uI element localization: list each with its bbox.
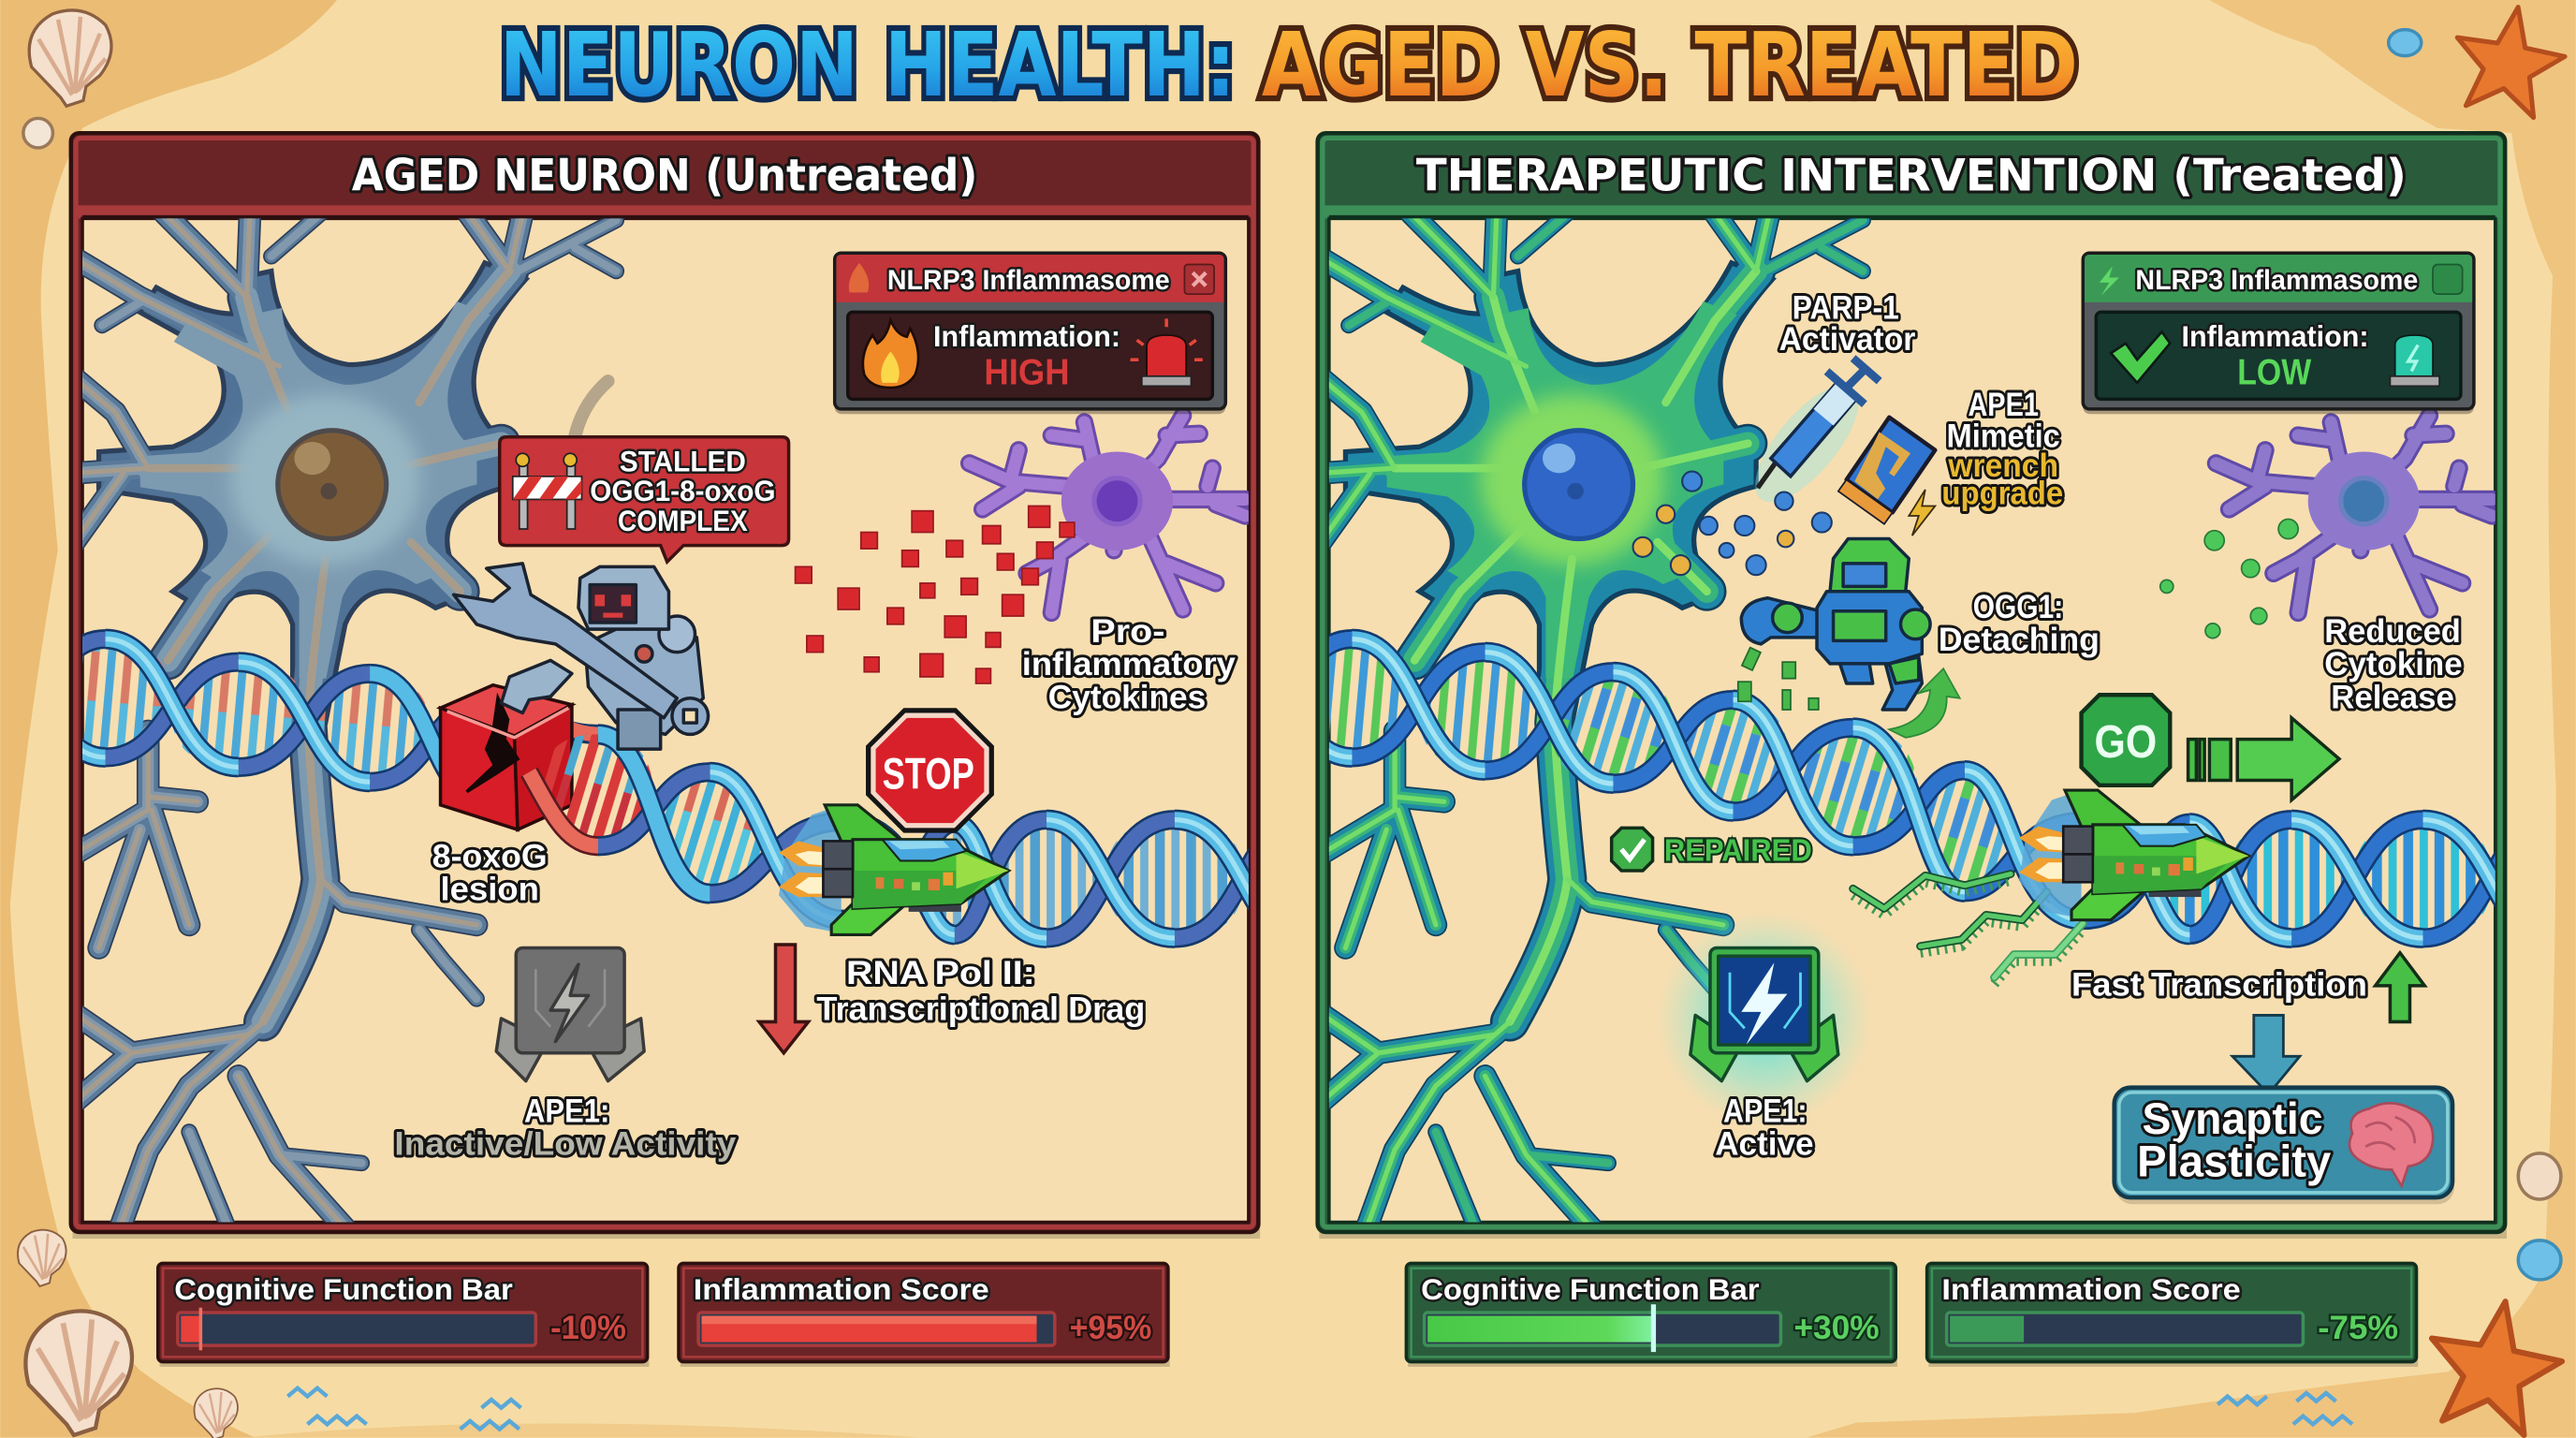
- title: blue part: NEURON HEALTH:: [500, 14, 1236, 117]
- label: PARP-1 activator: PARP-1: [1793, 289, 1899, 326]
- icon: stalled RNA polymerase rocket: [779, 805, 1009, 934]
- decoration: bottom-right starfish: [2418, 1290, 2570, 1438]
- icon: small flame: [849, 263, 869, 292]
- particles: blue and gold: [1632, 472, 1832, 575]
- particles: green cytokines: [2160, 519, 2298, 638]
- decoration: left small shell: [18, 1230, 66, 1286]
- icon: APE1 mimetic vial: [1838, 418, 1935, 536]
- stat card: aged cognitive function: Cognitive Function Bar: [174, 1272, 513, 1306]
- particles: green fragments: [1738, 648, 1819, 710]
- label: pro-inflammatory cytokines: inflammatory: [1022, 646, 1236, 682]
- panel frame: [71, 133, 1260, 1239]
- stat card: aged inflammation score: [679, 1263, 1170, 1367]
- stat card: treated cognitive function: Cognitive Function Bar: [1421, 1272, 1760, 1306]
- icon: brain: [2349, 1103, 2433, 1186]
- label: reduced cytokine release: Release: [2331, 679, 2454, 715]
- label: APE1 active: Active: [1715, 1126, 1814, 1163]
- icon: APE1 inactive chip: [496, 947, 644, 1081]
- close button: [1184, 265, 1214, 294]
- widget: NLRP3 high: [835, 253, 1225, 414]
- progress bar: [698, 1313, 1055, 1345]
- label: APE1 inactive: Inactive/Low Activity: [394, 1126, 737, 1163]
- DNA: red damaged lobe over lesion: [529, 734, 710, 894]
- status button: [2433, 265, 2463, 294]
- widget: NLRP3 high: HIGH: [984, 353, 1070, 393]
- decoration: right shell: [2518, 1153, 2561, 1199]
- arrow: up transcription: [2376, 953, 2424, 1021]
- progress bar: [178, 1308, 535, 1350]
- stat card: treated inflammation score: Inflammation Score: [1941, 1272, 2241, 1306]
- label: PARP-1 activator: Activator: [1779, 321, 1916, 358]
- panel: therapeutic intervention (treated): [158, 133, 2551, 1367]
- badge: repaired: [1612, 828, 1812, 871]
- decoration: top-left shell: [29, 10, 111, 106]
- aged neuron: [74, 213, 616, 1232]
- widget: NLRP3 high: NLRP3 Inflammasome: [887, 265, 1170, 296]
- microglia: pro-inflammatory: [970, 416, 1245, 613]
- label: APE1 mimetic wrench upgrade: wrench: [1947, 448, 2058, 484]
- decoration: top-right blue pebble: [2389, 30, 2422, 56]
- decoration: small pink shell: [195, 1388, 238, 1438]
- label: OGG1 detaching: [1939, 589, 2100, 658]
- arrow: transcription drag down: [759, 945, 809, 1053]
- decoration: right blue pebble: [2518, 1240, 2561, 1280]
- DNA helix repaired: [1221, 633, 2551, 938]
- callout: stalled complex: [500, 437, 789, 562]
- DNA helix with lesion: [0, 624, 1303, 938]
- cytokines: red particles: [796, 506, 1075, 683]
- stat card: aged cognitive function: -10%: [550, 1310, 626, 1346]
- neuron nucleus: [278, 431, 387, 539]
- widget: NLRP3 low: LOW: [2237, 353, 2312, 393]
- stat card: treated cognitive function: [1406, 1263, 1897, 1367]
- label: 8-oxoG lesion: [432, 838, 548, 908]
- stat card: aged cognitive function: [158, 1263, 649, 1367]
- callout: stalled complex: COMPLEX: [618, 504, 748, 537]
- stat card: treated inflammation score: [1927, 1263, 2418, 1367]
- mRNA strands: [1853, 874, 2083, 984]
- label: APE1 inactive: APE1:: [524, 1093, 609, 1129]
- label: fast transcription: Fast Transcription: [2071, 966, 2367, 1003]
- icon: check mark: [2111, 331, 2170, 383]
- label: APE1 mimetic wrench upgrade: [1941, 387, 2063, 512]
- label: reduced cytokine release: [2324, 613, 2463, 715]
- progress bar: [1947, 1313, 2303, 1345]
- panel scene: [82, 218, 1249, 1223]
- icon: flame: [863, 320, 918, 388]
- callout: stalled complex: OGG1-8-oxoG: [590, 474, 776, 507]
- panel frame: [1318, 133, 2507, 1239]
- treated neuron: [1321, 213, 1863, 1232]
- neuron nucleus: [1525, 431, 1632, 539]
- badge: GO sign: [2082, 695, 2170, 785]
- icon: PARP-1 syringe: [1738, 359, 1880, 518]
- stat card: treated inflammation score: -75%: [2318, 1310, 2398, 1346]
- label: reduced cytokine release: Reduced: [2324, 613, 2461, 650]
- decoration: top-right starfish: [2446, 0, 2572, 121]
- badge: GO sign: GO: [2095, 717, 2157, 768]
- panel: aged neuron (untreated): [0, 133, 1303, 1239]
- icon: 8-oxoG lesion cube: [441, 685, 572, 829]
- label: pro-inflammatory cytokines: [1022, 613, 1236, 715]
- label: APE1 mimetic wrench upgrade: Mimetic: [1947, 418, 2060, 454]
- icon: fast RNA polymerase rocket: [2019, 790, 2249, 920]
- label: APE1 mimetic wrench upgrade: upgrade: [1941, 476, 2063, 512]
- callout: synaptic plasticity: [2115, 1088, 2454, 1204]
- progress bar: [1425, 1304, 1780, 1352]
- panel heading: AGED NEURON (Untreated): [352, 151, 977, 202]
- decoration: water ripples left: [287, 1388, 521, 1430]
- arrow: forward green: [2188, 718, 2339, 800]
- wrench: [454, 564, 709, 734]
- icon: teal siren: [2390, 335, 2439, 386]
- robot: detaching OGG1: [1741, 539, 1930, 710]
- callout: synaptic plasticity: Plasticity: [2137, 1137, 2332, 1186]
- panel scene: [1221, 213, 2551, 1232]
- label: APE1 inactive: [394, 1093, 737, 1163]
- decoration: bottom-left shell: [25, 1311, 132, 1435]
- badge: repaired: REPAIRED: [1664, 833, 1812, 868]
- icon: stop sign: STOP: [883, 749, 974, 799]
- label: PARP-1 activator: [1779, 289, 1916, 358]
- label: APE1 active: APE1:: [1723, 1093, 1807, 1129]
- icon: red siren: [1131, 318, 1203, 386]
- robot: stalled OGG1 with wrench: [454, 564, 709, 749]
- arrow: curved detaching: [1889, 668, 1960, 738]
- icon: small bolt: [2100, 266, 2119, 296]
- decoration: water ripples right: [2217, 1393, 2352, 1424]
- stat card: aged inflammation score: Inflammation Score: [694, 1272, 989, 1306]
- decoration: small pebble: [23, 118, 52, 148]
- title: orange part: AGED VS. TREATED: [1262, 14, 2078, 117]
- label: RNA Pol II transcriptional drag: Transcriptional Drag: [816, 991, 1145, 1028]
- label: OGG1 detaching: Detaching: [1939, 622, 2100, 658]
- icon: check badge: [1612, 828, 1653, 871]
- label: pro-inflammatory cytokines: Pro-: [1090, 613, 1164, 650]
- label: APE1 active: [1715, 1093, 1814, 1163]
- microglia: reduced activation: [2216, 416, 2492, 613]
- callout: stalled complex: STALLED: [620, 445, 746, 478]
- label: reduced cytokine release: Cytokine: [2324, 646, 2463, 682]
- widget: NLRP3 low: Inflammation:: [2182, 319, 2369, 353]
- arrow: down to synaptic plasticity: [2232, 1015, 2300, 1094]
- title: [500, 14, 2078, 117]
- label: OGG1 detaching: OGG1:: [1973, 589, 2063, 625]
- label: APE1 mimetic wrench upgrade: APE1: [1968, 387, 2039, 423]
- label: RNA Pol II transcriptional drag: RNA Pol II:: [846, 955, 1035, 991]
- label: pro-inflammatory cytokines: Cytokines: [1048, 679, 1206, 715]
- icon: road barrier: [513, 453, 581, 529]
- stat card: aged inflammation score: +95%: [1070, 1310, 1151, 1346]
- panel heading: THERAPEUTIC INTERVENTION (Treated): [1416, 151, 2407, 202]
- widget: NLRP3 high: Inflammation:: [933, 319, 1120, 353]
- label: RNA Pol II transcriptional drag: [816, 955, 1145, 1028]
- stat card: treated cognitive function: +30%: [1793, 1310, 1880, 1346]
- callout: synaptic plasticity: Synaptic: [2142, 1094, 2322, 1144]
- icon: stop sign: [866, 708, 994, 833]
- label: 8-oxoG lesion: lesion: [441, 872, 539, 908]
- widget: NLRP3 low: [2083, 253, 2474, 414]
- icon: APE1 active chip: [1656, 910, 1873, 1127]
- widget: NLRP3 low: NLRP3 Inflammasome: [2135, 265, 2418, 296]
- label: 8-oxoG lesion: 8-oxoG: [432, 838, 548, 874]
